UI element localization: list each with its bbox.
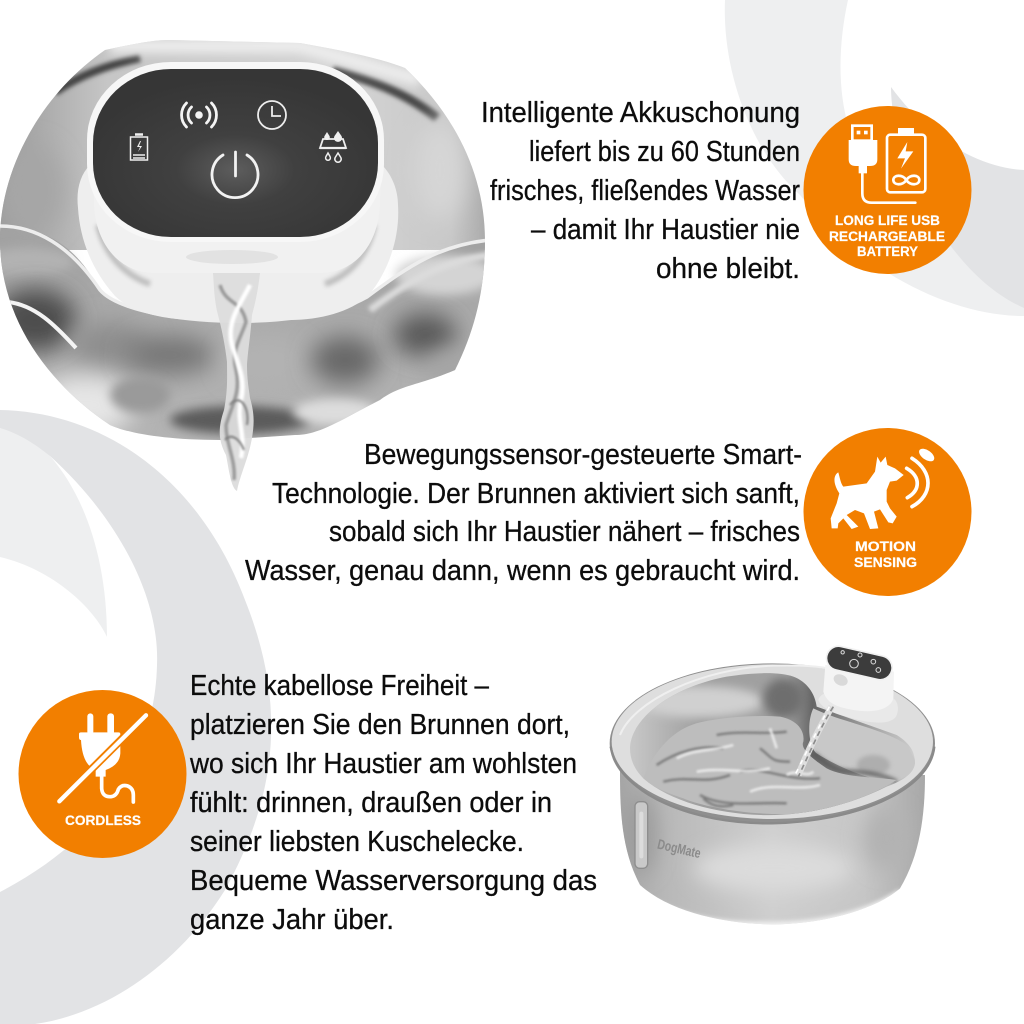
- water surface: [643, 716, 897, 814]
- photo: close-up of fountain control panel and water stream: [0, 30, 495, 491]
- module top panel: [824, 644, 895, 682]
- icon: power button: [212, 152, 258, 198]
- icon: signal: [182, 103, 216, 127]
- badge label: LONG LIFE USB: [835, 213, 940, 228]
- badge: cordless: [18, 690, 186, 858]
- text block: cordless: fühlt: drinnen, draußen oder in: [190, 787, 552, 819]
- device platform: [809, 708, 900, 783]
- brand lettering: DogMate: [656, 836, 703, 861]
- front rim edge: [611, 747, 934, 823]
- text block: motion sensor: Wasser, genau dann, wenn es gebraucht wird.: [245, 555, 800, 587]
- badge: long life USB rechargeable battery: [804, 106, 972, 274]
- text block: cordless: platzieren Sie den Brunnen dort,: [190, 709, 570, 741]
- badge label: [854, 539, 917, 570]
- icon: USB plug and battery: [849, 126, 925, 203]
- text block: motion sensor: sobald sich Ihr Haustier nähert – frisches: [329, 516, 800, 548]
- photo: stainless steel fountain bowl: [610, 644, 935, 928]
- text block: battery: Intelligente Akkuschonung: [481, 97, 800, 129]
- fountain white body: [92, 130, 382, 273]
- icon: dog with motion waves: [831, 446, 936, 529]
- text block: battery: ohne bleibt.: [656, 253, 800, 285]
- module flange: [818, 692, 898, 723]
- icon: clock: [258, 101, 286, 129]
- text block: cordless: [189, 670, 597, 936]
- falling water: [798, 707, 832, 775]
- text block: cordless: Echte kabellose Freiheit –: [190, 670, 489, 702]
- text block: motion sensor: [245, 439, 802, 587]
- black control panel: [93, 69, 378, 237]
- module white body: [823, 665, 894, 711]
- panel bezel: [87, 62, 384, 242]
- text block: cordless: ganze Jahr über.: [190, 904, 394, 936]
- badge label: SENSING: [854, 555, 917, 570]
- badge label: [829, 213, 945, 259]
- text block: motion sensor: Bewegungssensor-gesteuerte Smart-: [364, 439, 802, 471]
- side window: [635, 802, 648, 868]
- icon: water filter drops: [320, 131, 346, 162]
- text block: battery: liefert bis zu 60 Stunden: [529, 136, 800, 168]
- fountain flange: [78, 165, 398, 320]
- icon: crossed-out plug: [57, 713, 148, 804]
- text block: battery: frisches, fließendes Wasser: [490, 175, 800, 207]
- rim: [610, 663, 935, 823]
- bowl body: [620, 768, 925, 924]
- badge: motion sensing: [804, 428, 972, 596]
- text block: battery: [481, 97, 800, 285]
- text block: battery: – damit Ihr Haustier nie: [531, 214, 800, 246]
- text block: cordless: Bequeme Wasserversorgung das: [190, 865, 597, 897]
- badge label: RECHARGEABLE: [829, 229, 945, 244]
- spout slot: [186, 250, 278, 264]
- text block: cordless: wo sich Ihr Haustier am wohlsten: [189, 748, 577, 780]
- rim highlight line: [0, 226, 490, 321]
- text block: motion sensor: Technologie. Der Brunnen aktiviert sich sanft,: [272, 478, 800, 510]
- rim reflection streak: [8, 302, 76, 348]
- badge label: MOTION: [855, 539, 916, 554]
- bowl interior wall: [630, 673, 915, 815]
- icon: battery: [130, 134, 148, 160]
- water stream: [213, 273, 260, 491]
- badge label: BATTERY: [857, 244, 918, 259]
- badge label: CORDLESS: [65, 813, 141, 828]
- text block: cordless: seiner liebsten Kuschelecke.: [190, 826, 524, 858]
